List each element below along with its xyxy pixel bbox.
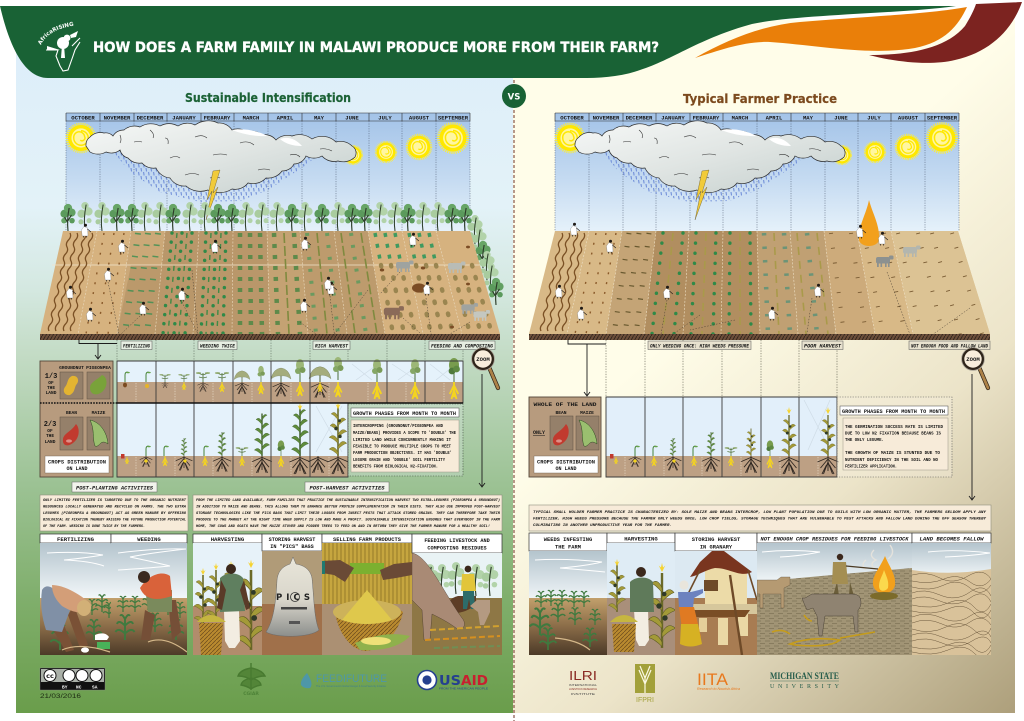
logo: CGIAR — [238, 663, 265, 697]
plot dividers — [78, 231, 462, 334]
storm cloud — [86, 121, 356, 193]
growth phases body: LEGUME GRAIN AND 'DOUBLE' SOIL FERTILITY — [353, 458, 445, 463]
post-planting text: BIOLOGICAL N2 FIXATION THEREBY RAISING THE FUTURE PRODUCTION POTENTIAL — [43, 518, 187, 522]
right farm field — [529, 200, 990, 340]
panel: storing harvest in granary: STORING HARVEST — [692, 537, 741, 543]
panel: fertilizing — [40, 534, 115, 655]
growth phases body: FEASIBLE TO PRODUCE MULTIPLE CROPS TO MEET — [353, 444, 451, 450]
two thirds label: OF — [47, 428, 53, 434]
panel: weeds infesting the farm — [529, 533, 607, 655]
header banner — [0, 2, 1022, 78]
logo: IFPRI — [635, 664, 655, 704]
panel: land becomes fallow — [912, 533, 991, 657]
fallow marks — [831, 233, 982, 334]
logo: CGIAR: CGIAR — [243, 691, 259, 697]
two thirds label — [44, 421, 56, 445]
label: Fertilizing — [121, 341, 152, 350]
sparse crop — [614, 233, 649, 334]
panel: land becomes fallow: LAND BECOMES FALLOW — [920, 536, 984, 542]
month labels: MARCH — [243, 114, 259, 122]
one third label — [45, 373, 57, 396]
growth phases body: BENEFITS FROM BIOLOGICAL N2-FIXATION. — [353, 464, 438, 470]
left zoom arrow — [479, 374, 485, 487]
left season calendar — [66, 113, 470, 231]
month grid — [555, 113, 959, 121]
label: Weeding twice — [198, 341, 237, 350]
heading: Sustainable Intensification: Sustainable Intensification — [185, 91, 351, 105]
weeds — [652, 233, 751, 334]
crops distribution label — [534, 456, 598, 473]
label: Post-planting activities: POST-PLANTING ACTIVITIES — [76, 486, 154, 492]
soil dividers — [625, 457, 818, 476]
panel: harvesting: HARVESTING — [211, 536, 245, 543]
left farm field — [40, 224, 500, 340]
logo: Africa Rising — [38, 22, 80, 72]
typical practice text — [529, 505, 991, 531]
two thirds label: 2/3 — [44, 421, 56, 429]
post-harvest text: HOME, THE COWS AND GOATS HAVE THE MAIZE STOVER AND FODDER TREES TO FEED ON AND IN RETURN THEY GIVE THE FARMER MANURE FOR A HEALTHY SOIL! — [196, 525, 490, 529]
young crop rows — [125, 233, 158, 334]
post-planting text: ONLY LIMITED FERTILIZER IS TARGETED DUE TO THE ORGANIC NUTRIENT — [43, 499, 187, 503]
bean card: BEAN — [555, 410, 567, 416]
month labels: JUNE — [834, 114, 848, 122]
soil edge — [529, 334, 990, 340]
logo: USAID: AID — [461, 674, 488, 689]
rain — [601, 150, 807, 202]
right growth panel — [606, 397, 838, 477]
logo: Africa Rising: AfricaRISING — [38, 22, 74, 45]
crops distribution label: ON LAND — [66, 466, 88, 472]
post-harvest text — [193, 495, 502, 531]
month labels: MAY — [803, 114, 814, 122]
two thirds label: THE — [46, 433, 54, 439]
scene: granary — [675, 551, 757, 655]
growth phases body: INTERCROPPING (GROUNDNUT/PIGEONPEA AND — [353, 424, 443, 429]
panel: storing in PICS bags: IN "PICS" BAGS — [270, 544, 314, 550]
panel: weeds infesting the farm: THE FARM — [555, 544, 581, 550]
post-planting text: LEGUMES (PIGEONPEA & GROUNDNUT) ACT AS GREEN MANURE BY OFFERING — [43, 511, 187, 516]
growth phases body: FARM PRODUCTION OBJECTIVES. IT HAS 'DOUBLE' — [353, 451, 452, 456]
olive crop rows — [240, 233, 300, 334]
VS badge — [502, 84, 526, 108]
logo: Creative Commons: BY — [62, 684, 68, 690]
left zoom magnifier: ZOOM — [476, 356, 490, 363]
darker plots — [117, 231, 165, 334]
panel: harvesting (typical) — [607, 533, 676, 655]
one third label: LAND — [46, 390, 57, 396]
logo: Michigan State University: UNIVERSITY — [770, 684, 840, 690]
growth phases body: FERTILIZER APPLICATION. — [845, 464, 897, 470]
cows — [876, 246, 920, 267]
one third label: OF — [48, 380, 54, 386]
logo: IITA — [697, 670, 740, 691]
burning fire — [859, 200, 879, 246]
soil dividers — [136, 383, 444, 476]
logo: USAID: FROM THE AMERICAN PEOPLE — [439, 686, 488, 690]
label: Post-harvest activities: POST-HARVEST ACTIVITIES — [310, 486, 385, 492]
right panel background — [513, 20, 1015, 713]
grid lines — [117, 361, 463, 477]
right season calendar — [555, 113, 959, 231]
one third label: THE — [47, 385, 55, 391]
logo: ILRI: INTERNATIONAL — [569, 683, 597, 687]
seeds — [575, 233, 616, 334]
post-harvest text: FROM THE LIMITED LAND AVAILABLE, FARM FAMILIES THAT PRACTICE THE SUSTAINABLE INTENSIFICATION HARVEST TWO EXTRA-LEGUMES (PIGEONPEA & GROUNDNUT) — [196, 498, 500, 503]
label: Post-harvest activities — [305, 482, 389, 492]
cows — [384, 260, 490, 321]
weeded crop rows — [163, 233, 226, 334]
maize card: MAIZE — [580, 410, 594, 416]
month labels: NOVEMBER — [104, 114, 131, 122]
planted seeds — [86, 233, 124, 334]
left growth panel — [40, 357, 463, 477]
ridges — [48, 233, 93, 331]
arrow: left plot to crop table — [79, 340, 117, 359]
growth phases body: MAIZE/BEANS) PROVIDES A SCOPE TO 'DOUBLE' THE — [353, 431, 456, 436]
ghost marks — [804, 400, 830, 450]
month labels: APRIL — [277, 114, 294, 122]
left tree line — [60, 202, 504, 305]
pigeonpea card: PIGEONPEA — [86, 365, 111, 371]
panel: storing harvest in granary: IN GRANARY — [700, 544, 733, 550]
growth phases title: GROWTH PHASES FROM MONTH TO MONTH — [842, 409, 945, 415]
typical practice text: FERTILIZER, HIGH WEEDS PRESSURE BECAUSE THE FARMER ONLY WEEDS ONCE, LOW CROP YIELDS, STORAGE TECHNIQUES THAT ARE VULNERABLE TO PEST ATTACKS AND FALLOW LAND DURING THE OFF SEASON THEREBY — [533, 518, 987, 522]
plot dividers — [567, 231, 913, 334]
date: 21/03/2016 — [40, 693, 81, 700]
ridges — [540, 233, 585, 331]
grid lines — [606, 397, 837, 477]
logo: IITA: Research to Nourish Africa — [697, 687, 740, 691]
scene: PICS bag: PICS — [276, 593, 310, 603]
month labels: JULY — [378, 114, 392, 122]
maroon swoosh — [869, 2, 1022, 63]
panel: harvesting — [193, 534, 265, 655]
scene: harvesting typical — [607, 543, 675, 655]
logo: IFPRI: IFPRI — [636, 697, 654, 704]
panel: harvesting (typical): HARVESTING — [624, 536, 658, 542]
scene: residues and burning — [757, 543, 912, 655]
month labels — [71, 114, 469, 122]
month labels: JANUARY — [661, 114, 685, 122]
growth phases body: NUTRIENT DEFICIENCY IN THE SOIL AND NO — [845, 458, 938, 463]
right zoom magnifier — [962, 348, 988, 388]
month labels: DECEMBER — [137, 114, 164, 122]
label: Only weeding once — [648, 341, 751, 350]
faint plants — [764, 233, 817, 334]
post-planting text: RESOURCES LOCALLY GENERATED AND RECYCLED ON FARMS. THE TWO EXTRA — [43, 506, 187, 510]
groundnut and pigeonpea growth — [123, 357, 460, 399]
post-harvest text: PRODUCE TO THE MARKET AT THE RIGHT TIME WHEN SUPPLY IS LOW AND MAKE A PROFIT. SUSTAINABLE INTENSIFICATION ENSURES THAT EVERYBODY IN THE FARM — [196, 518, 501, 522]
month labels: AUGUST — [409, 114, 430, 122]
label: Rich harvest: RICH HARVEST — [315, 344, 349, 350]
label: Poor harvest: POOR HARVEST — [804, 344, 842, 350]
panel: fertilizing: FERTILIZING — [57, 536, 95, 543]
legume rows — [307, 233, 366, 334]
logo: Feed the Future: The U.S. Government's Global Hunger & Food Security Initiative — [316, 684, 386, 688]
panel: feeding livestock and composting: FEEDING LIVESTOCK AND — [424, 538, 490, 544]
sky — [66, 113, 470, 231]
month labels: DECEMBER — [626, 114, 653, 122]
lightning bolt — [206, 170, 220, 220]
manure heaps — [380, 246, 470, 328]
right month guides — [606, 340, 837, 397]
two thirds label: LAND — [45, 439, 56, 445]
panel: selling farm products — [322, 534, 412, 655]
month labels: OCTOBER — [71, 114, 95, 122]
sky and soil — [117, 361, 463, 382]
scene: weeds — [529, 551, 607, 655]
maize card: MAIZE — [92, 410, 106, 416]
right zoom arrow — [969, 374, 975, 500]
growth phases title: GROWTH PHASES FROM MONTH TO MONTH — [353, 411, 456, 417]
label: Post-planting activities — [72, 482, 157, 492]
left month guides — [117, 340, 463, 361]
panel: selling farm products: SELLING FARM PRODUCTS — [333, 537, 402, 543]
month labels: MAY — [314, 114, 325, 122]
logo: Creative Commons — [40, 668, 105, 690]
logo: Creative Commons: cc — [46, 672, 54, 680]
label: Fertilizing: FERTILIZING — [123, 344, 151, 350]
right growth explanation — [837, 397, 952, 477]
scene: weeding — [111, 543, 187, 655]
whole of the land: WHOLE OF THE LAND — [534, 402, 597, 408]
logo: Creative Commons: NC — [76, 684, 82, 690]
one third label: 1/3 — [45, 373, 57, 381]
logo: USAID: US — [439, 674, 461, 689]
callout leader lines — [660, 272, 970, 340]
panel: not enough crop residues: NOT ENOUGH CROP RESIDUES FOR FEEDING LIVESTOCK — [760, 536, 909, 542]
month labels — [560, 114, 958, 122]
callout leader lines — [108, 270, 470, 340]
growth phases body: DUE TO LOW N2 FIXATION BECAUSE BEANS IS — [845, 432, 941, 436]
typical practice text: CULMINATING IN ANOTHER UNPRODUCTIVE YEAR FOR THE FARMER. — [533, 524, 672, 528]
heading: Typical Farmer Practice: Typical Farmer Practice — [683, 92, 837, 106]
panel: storing harvest in granary — [675, 533, 757, 655]
logo: ILRI: LIVESTOCK RESEARCH — [569, 687, 597, 691]
plots — [606, 231, 656, 334]
VS badge: VS — [508, 92, 520, 102]
panel: not enough crop residues — [757, 533, 912, 655]
scene: harvesting — [193, 543, 262, 655]
scene: feeding — [412, 553, 502, 655]
panel: weeding: WEEDING — [137, 536, 161, 543]
upper right green plants — [375, 233, 436, 265]
growth phases body: THE ONLY LEGUME. — [845, 438, 884, 443]
month labels: FEBRUARY — [693, 114, 720, 122]
only label: ONLY — [533, 430, 545, 436]
centre dashed divider — [513, 80, 515, 721]
suns — [67, 124, 467, 164]
farmers — [66, 224, 433, 322]
right crop distribution table — [529, 397, 601, 477]
panel: feeding livestock and composting — [410, 534, 502, 655]
panel: storing in PICS bags — [262, 534, 322, 655]
crops distribution label — [45, 456, 109, 473]
panel: storing in PICS bags: STORING HARVEST — [269, 537, 315, 543]
field base — [40, 231, 500, 334]
farmers — [555, 223, 888, 320]
left zoom magnifier — [472, 348, 498, 388]
month labels: JUNE — [345, 114, 359, 122]
logo: Michigan State University — [770, 671, 840, 690]
post-harvest text: IN ADDITION TO MAIZE AND BEANS. THIS ALLOWS THEM TO ENHANCE BETTER PROTEIN SUPPLEMENTATION IN THEIR DIETS. THEY ALSO USE IMPROVED POST-HARVEST — [196, 506, 501, 510]
logo: USAID — [418, 670, 488, 690]
groundnut card: GROUNDNUT — [59, 365, 84, 371]
logo: ILRI: ILRI — [569, 668, 597, 683]
ghost plant marks — [316, 364, 456, 452]
post-planting text — [40, 495, 188, 531]
logo: IITA: IITA — [697, 670, 729, 689]
panel: weeding — [111, 534, 187, 655]
logo: ILRI — [569, 668, 597, 696]
sky — [555, 113, 959, 231]
storm cloud — [575, 121, 845, 193]
sky and soil — [606, 397, 837, 456]
label: Only weeding once: ONLY WEEDING ONCE: HIGH WEEDS PRESSURE — [650, 344, 750, 350]
left crop distribution table — [40, 361, 113, 477]
logo: Creative Commons: SA — [92, 684, 98, 690]
month labels: SEPTEMBER — [927, 114, 958, 122]
field base — [529, 231, 990, 334]
scene: fallow land — [912, 543, 991, 655]
growth phases body — [351, 420, 459, 472]
month labels: JULY — [867, 114, 881, 122]
label: Rich harvest — [313, 341, 350, 350]
scene: selling — [322, 543, 412, 655]
month labels: OCTOBER — [560, 114, 584, 122]
logo: Feed the Future: FEEDIFUTURE — [316, 673, 387, 685]
month labels: SEPTEMBER — [438, 114, 469, 122]
label: Weeding twice: WEEDING TWICE — [200, 344, 236, 350]
month labels: NOVEMBER — [593, 114, 620, 122]
left growth explanation — [348, 404, 463, 476]
label: Feeding and composting: FEEDING AND COMPOSTING — [431, 344, 494, 350]
logo: Michigan State University: MICHIGAN STATE — [770, 671, 839, 681]
typical practice text: TYPICAL SMALL HOLDER FARMER PRACTICE IS CHARACTERIZED BY: SOLE MAIZE AND BEANS INTERCROP, LOW PLANT POPULATION DUE TO SOILS WITH LOW ORGANIC MATTER, THE FARMERS SELDOM APPLY ANY — [533, 511, 987, 515]
bean and stunted maize growth — [610, 407, 838, 474]
rain — [112, 150, 318, 202]
orange swoosh — [695, 7, 967, 58]
label: Not enough food: NOT ENOUGH FOOD AND FALLOW LAND — [911, 344, 989, 350]
growth phases body — [843, 418, 948, 470]
poor stalks — [663, 233, 828, 334]
post-planting text: OF THE FARM. WEEDING IS DONE TWICE BY THE FARMERS. — [43, 525, 145, 529]
bean and maize growth — [121, 402, 348, 474]
logo: Feed the Future — [301, 673, 387, 688]
soil edge — [40, 334, 500, 340]
panel: weeds infesting the farm: WEEDS INFESTING — [544, 537, 592, 543]
dotted row divider — [40, 402, 117, 404]
crops distribution label: CROPS DISTRIBUTION — [48, 460, 106, 466]
green banner shape — [0, 6, 956, 78]
month labels: MARCH — [732, 114, 748, 122]
arrow: right plot to crop table — [568, 340, 606, 396]
bean card: BEAN — [66, 410, 77, 416]
left panel background — [16, 20, 513, 713]
month labels: JANUARY — [172, 114, 196, 122]
suns — [556, 124, 956, 164]
crops distribution label: CROPS DISTRIBUTION — [537, 460, 595, 466]
label: Poor harvest — [802, 341, 843, 350]
growth phases body: LIMITED LAND WHILE CONCURRENTLY MAKING IT — [353, 438, 451, 443]
residues — [381, 265, 492, 334]
main title: HOW DOES A FARM FAMILY IN MALAWI PRODUCE MORE FROM THEIR FARM? — [93, 40, 659, 56]
growth phases body: THE GERMINATION SUCCESS RATE IS LIMITED — [845, 425, 943, 430]
label: Not enough food — [909, 341, 990, 350]
logo: ILRI: INSTITUTE — [571, 692, 595, 696]
panel: feeding livestock and composting: COMPOSTING RESIDUES — [427, 546, 487, 552]
month labels: AUGUST — [898, 114, 919, 122]
tall maize rows — [284, 233, 377, 334]
lightning bolt — [695, 170, 709, 220]
month labels: FEBRUARY — [204, 114, 231, 122]
crop stalks — [168, 233, 221, 334]
scene: fertilizing — [40, 543, 111, 655]
right zoom magnifier: ZOOM — [966, 356, 980, 363]
crops distribution label: ON LAND — [555, 466, 577, 472]
month labels: APRIL — [766, 114, 783, 122]
label: Feeding and composting — [429, 341, 495, 350]
growth phases body: THE GROWTH OF MAIZE IS STUNTED DUE TO — [845, 451, 940, 456]
month grid — [66, 113, 470, 121]
post-harvest text: STORAGE TECHNOLOGIES LIKE THE PICS BAGS THAT LIMIT THEIR LOSSES FROM INSECT PESTS THAT ATTACK STORED GRAINS. THEY CAN THEREFORE TAKE THEIR — [196, 512, 501, 516]
